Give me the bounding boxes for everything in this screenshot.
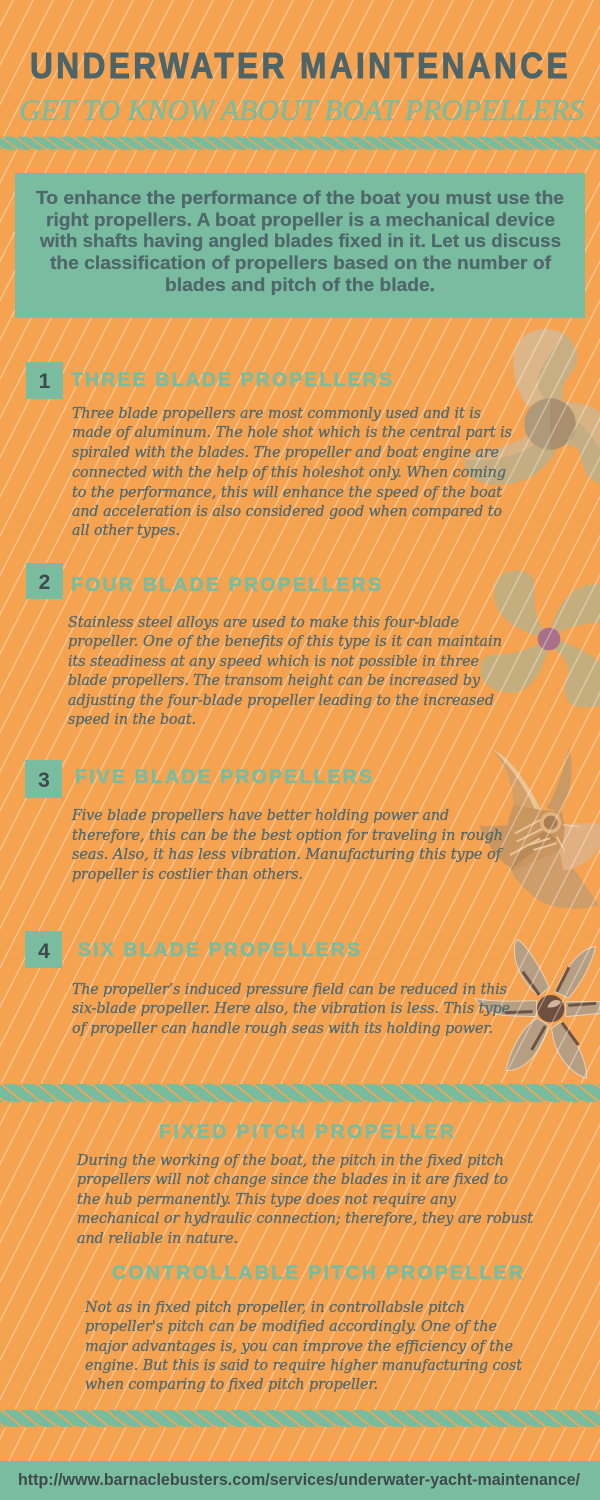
text: three blade description: made of aluminum. The hole shot which is the central part is <box>72 423 512 441</box>
section 2: four blade propellers <box>26 563 502 728</box>
subtitle: GET TO KNOW ABOUT BOAT PROPELLERS <box>19 94 584 127</box>
text: three blade description: all other types. <box>72 521 180 539</box>
panel: introduction: blades and pitch of the blade. <box>165 275 435 295</box>
text: three blade description: spiraled with the blades. The propeller and boat engine are <box>72 443 499 461</box>
icon: six blade propeller <box>475 939 600 1078</box>
icon: three blade propeller <box>465 329 600 485</box>
text: controllable pitch description: Not as in fixed pitch propeller, in controllabsle pitch <box>84 1298 465 1316</box>
rope divider: bottom <box>0 1409 600 1428</box>
rope divider: top <box>0 136 600 150</box>
text: four blade description: propeller. One of the benefits of this type is it can maintain <box>68 632 502 650</box>
text: four blade description: blade propellers. The transom height can be increased by <box>68 671 480 689</box>
text: five blade description: therefore, this can be the best option for traveling in rough <box>72 826 503 844</box>
text: controllable pitch description: when comparing to fixed pitch propeller. <box>85 1375 378 1393</box>
text: fixed pitch description: mechanical or hydraulic connection; therefore, they are robust <box>77 1209 534 1227</box>
text: fixed pitch description: During the working of the boat, the pitch in the fixed pitch <box>76 1151 504 1169</box>
text: six blade description: six-blade propeller. Here also, the vibration is less. This type <box>72 999 510 1017</box>
heading: six blade propellers: SIX BLADE PROPELLERS <box>78 939 360 961</box>
footer: website url: http://www.barnaclebusters.com/services/underwater-yacht-maintenance/ <box>18 1471 580 1489</box>
heading: five blade propellers: FIVE BLADE PROPELLERS <box>75 766 372 788</box>
text: fixed pitch description: the hub permanently. This type does not require any <box>77 1190 456 1208</box>
text: three blade description: Three blade propellers are most commonly used and it is <box>72 404 481 422</box>
number badge 4: 4 <box>38 940 50 963</box>
text: four blade description: Stainless steel alloys are used to make this four-blade <box>68 613 459 631</box>
text: three blade description: and acceleration is also considered good when compared to <box>72 502 502 520</box>
text: five blade description: seas. Also, it has less vibration. Manufacturing this type of <box>72 845 503 863</box>
panel: introduction: with shafts having angled blades fixed in it. Let us discuss <box>39 231 561 251</box>
icon: five blade propeller <box>479 746 600 909</box>
text: four blade description: adjusting the four-blade propeller leading to the increased <box>68 691 494 709</box>
heading: three blade propellers: THREE BLADE PROPELLERS <box>71 369 392 391</box>
text: six blade description: of propeller can handle rough seas with its holding power. <box>72 1019 493 1037</box>
number badge 3 <box>25 760 62 798</box>
panel: introduction: right propellers. A boat propeller is a mechanical device <box>46 210 555 230</box>
text: fixed pitch description: and reliable in nature. <box>77 1229 238 1247</box>
icon: four blade propeller <box>480 571 600 707</box>
panel: introduction: the classification of propellers based on the number of <box>50 253 552 273</box>
panel: introduction <box>15 173 585 318</box>
panel: introduction: To enhance the performance of the boat you must use the <box>36 188 564 208</box>
number badge 2: 2 <box>39 571 50 594</box>
text: six blade description <box>72 980 510 1037</box>
section 1: three blade propellers <box>26 362 512 539</box>
number badge 2 <box>26 563 63 599</box>
text: three blade description: connected with the help of this holeshot only. When coming <box>72 463 506 481</box>
heading: controllable pitch propeller: CONTROLLABLE PITCH PROPELLER <box>112 1262 523 1284</box>
heading: fixed pitch propeller: FIXED PITCH PROPELLER <box>159 1121 454 1143</box>
title: UNDERWATER MAINTENANCE <box>30 46 568 86</box>
text: three blade description <box>72 404 512 539</box>
number badge 1: 1 <box>39 370 51 393</box>
section 3: five blade propellers <box>25 760 503 883</box>
text: controllable pitch description: major advantages is, you can improve the efficiency of the <box>85 1337 513 1355</box>
text: three blade description: to the performance, this will enhance the speed of the boat <box>72 483 503 501</box>
section 4: six blade propellers <box>25 931 510 1037</box>
text: four blade description: speed in the boat. <box>68 710 196 728</box>
text: five blade description <box>71 806 503 883</box>
text: fixed pitch description <box>76 1151 534 1247</box>
text: controllable pitch description <box>84 1298 523 1393</box>
text: five blade description: Five blade propellers have better holding power and <box>71 806 449 824</box>
text: controllable pitch description: propeller's pitch can be modified accordingly. One of the <box>85 1317 497 1335</box>
number badge 1 <box>26 362 63 399</box>
text: four blade description <box>68 613 502 728</box>
text: five blade description: propeller is costlier than others. <box>72 865 303 883</box>
footer: website url <box>0 1461 600 1500</box>
text: fixed pitch description: propellers will not change since the blades in it are fixed to <box>77 1170 508 1188</box>
heading: four blade propellers: FOUR BLADE PROPELLERS <box>71 574 381 596</box>
text: six blade description: The propeller’s induced pressure field can be reduced in this <box>72 980 507 998</box>
number badge 3: 3 <box>38 769 50 792</box>
text: four blade description: its steadiness at any speed which is not possible in three <box>68 652 479 670</box>
number badge 4 <box>25 931 62 968</box>
rope divider: middle <box>0 1083 600 1103</box>
text: controllable pitch description: engine. But this is said to require higher manufacturing cost <box>85 1356 523 1374</box>
